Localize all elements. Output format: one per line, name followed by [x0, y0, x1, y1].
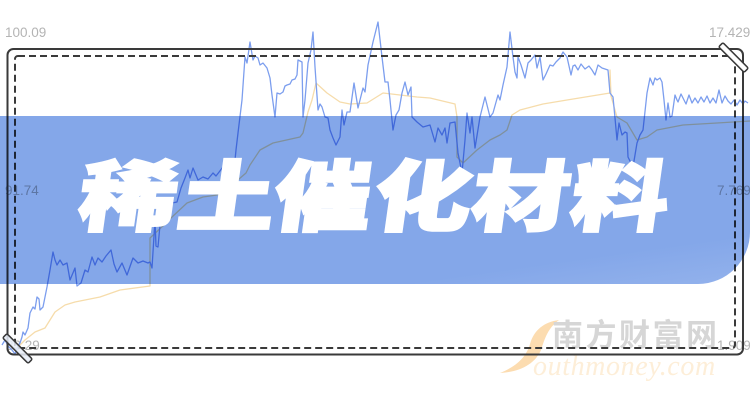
title: 料: [565, 156, 675, 242]
outer solid frame: [8, 49, 743, 354]
inner dashed frame: [15, 56, 735, 348]
average line: [17, 70, 750, 348]
title band: [0, 116, 750, 284]
title: 催: [268, 156, 378, 242]
axis label: top right: 17.429: [709, 25, 750, 40]
watermark: southmoney logo: 南方财富网: [552, 318, 720, 353]
title: 化: [368, 156, 478, 242]
axis label: bottom left: 83.29: [6, 338, 40, 353]
title: 稀: [73, 156, 183, 242]
axis label: top left: 100.09: [5, 25, 46, 40]
axis label: bottom right: 1.909: [717, 338, 750, 353]
title: 土: [172, 156, 282, 242]
watermark: southmoney logo: outhmoney.com: [533, 351, 716, 382]
watermark: southmoney logo: [500, 318, 720, 382]
title: [73, 156, 675, 242]
title: 材: [466, 156, 576, 242]
axis label: middle right: 7.769: [717, 183, 750, 198]
axis label: middle left: 91.74: [5, 183, 39, 198]
